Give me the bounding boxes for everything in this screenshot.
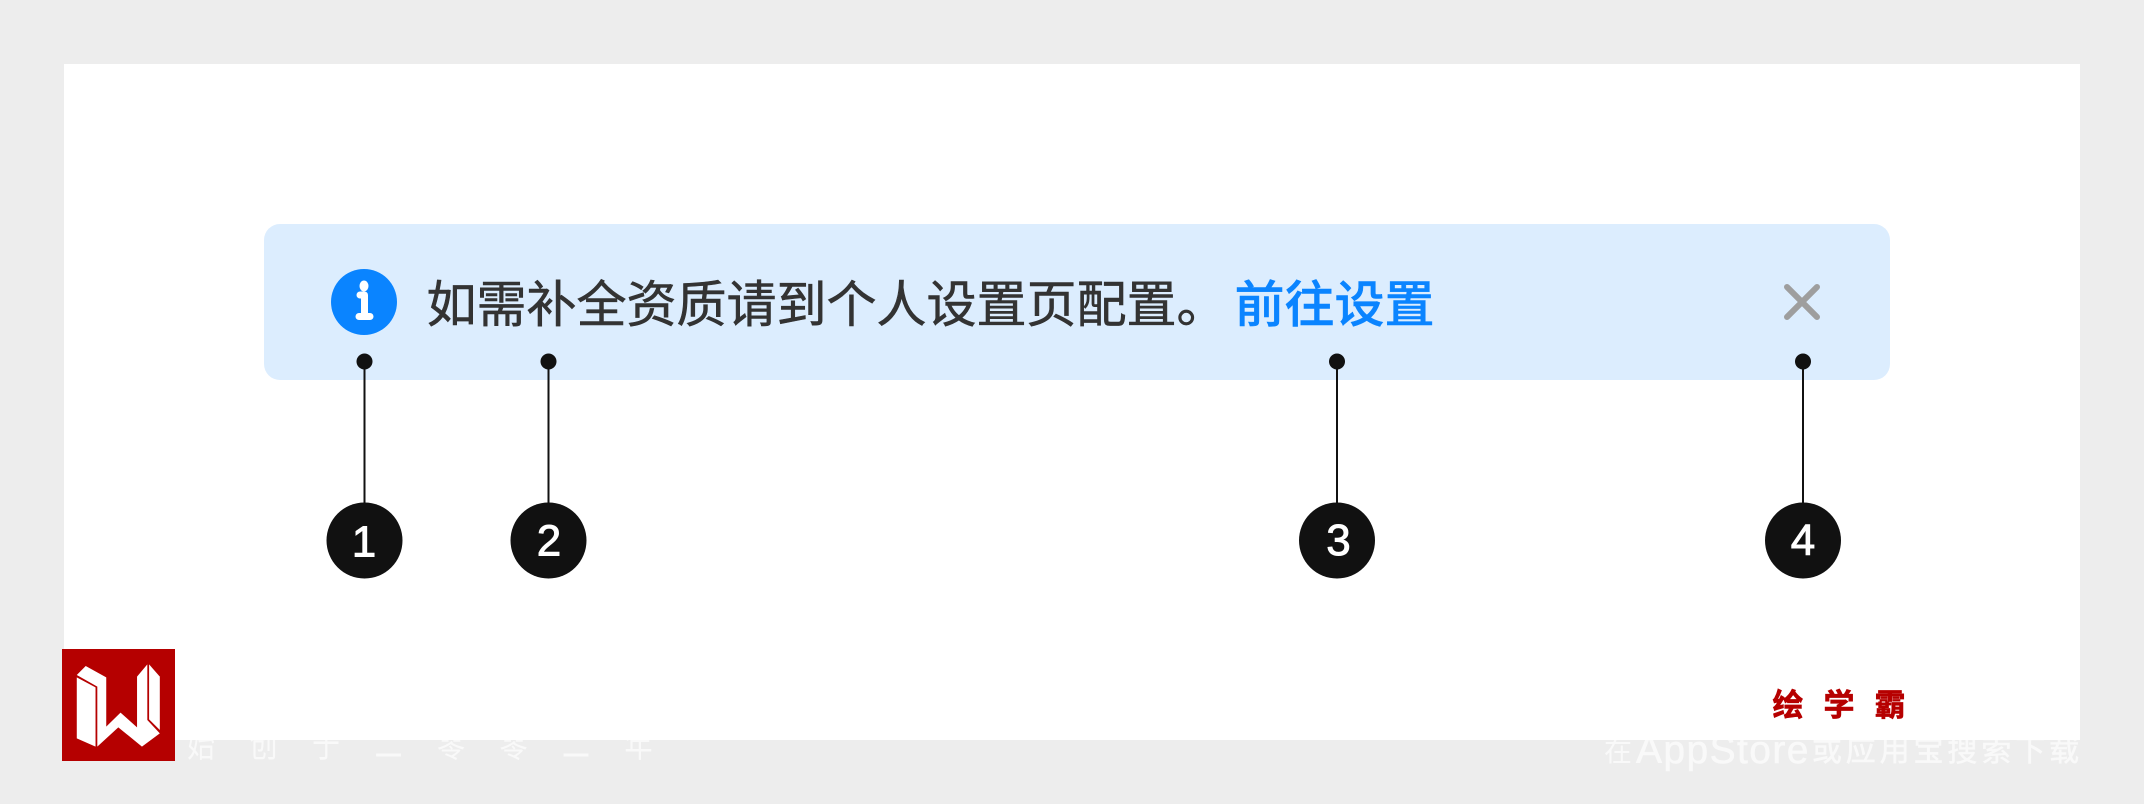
- marker 3: 3: [1326, 516, 1351, 565]
- marker 2: [510, 354, 586, 578]
- marker 1: 1: [352, 518, 376, 566]
- icon: info circle: [331, 269, 397, 335]
- marker 4: [1765, 354, 1841, 578]
- icon: close: [1784, 284, 1820, 320]
- banner link text: 前往设置: [1234, 276, 1434, 332]
- footer slogan: 始创于二零零二年: [187, 726, 687, 764]
- white panel: [64, 64, 2080, 740]
- notification banner: [264, 224, 1890, 380]
- marker 3: [1299, 354, 1375, 578]
- marker 2: 2: [537, 516, 561, 566]
- marker 4: 4: [1791, 516, 1815, 565]
- brand name: 绘学霸: [1772, 688, 1926, 723]
- banner message text: 如需补全资质请到个人设置页配置。: [426, 276, 1226, 332]
- marker 1: [326, 354, 402, 578]
- footer download note: 在AppStore或应用宝搜索下载: [1604, 730, 2080, 772]
